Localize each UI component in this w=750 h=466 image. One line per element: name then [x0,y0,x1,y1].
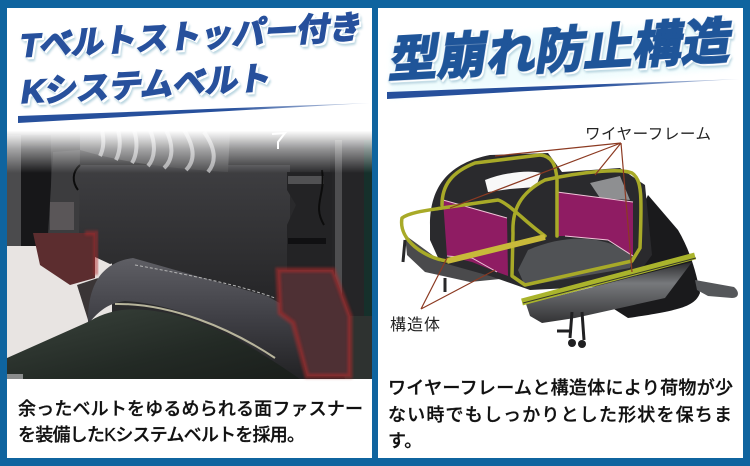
bag right zipper [330,140,372,316]
side tab [695,280,738,298]
left buckle [48,150,80,235]
right buckle [287,172,332,270]
logo icon [272,133,285,149]
left wing underside [405,235,510,282]
title [18,9,365,110]
backdrop [7,245,112,363]
description: す。 [388,431,422,451]
fabric [75,165,290,300]
panel: T-belt stopper K-system belt [7,8,372,458]
title underline [18,103,370,123]
title: 型崩れ防止構造 [386,13,736,88]
title: Kシステムベルト [19,60,274,110]
wave pattern [80,130,230,172]
red leader lines [421,143,632,309]
label: structure: 構造体 [390,316,440,334]
green seat [7,309,300,379]
bag left edge [7,135,21,246]
description: 余ったベルトをゆるめられる面ファスナー [18,399,363,419]
seat leather [88,258,345,379]
label: wire frame: ワイヤーフレーム [585,126,711,143]
lower pouch [526,262,692,323]
left zip pulls [403,240,445,292]
interior [518,239,635,286]
title underline [387,79,740,99]
belt photo [7,125,372,379]
zip pulls [557,312,584,340]
description [18,399,363,445]
panel: shape retention structure [378,8,743,458]
title: Tベルトストッパー付き [18,9,365,64]
main bag [430,153,652,290]
rear black body [600,195,700,318]
magenta structure panels [443,200,508,276]
top of right lobe highlight [590,176,630,200]
handle opening [485,172,541,192]
description [388,377,733,451]
description: を装備したKシステムベルトを採用。 [18,425,305,445]
right belt [278,270,350,376]
bag diagram [402,143,738,348]
description: ない時でもしっかりとした形状を保ちま [388,405,732,425]
right lower dark [345,316,372,379]
yellow wire frames [402,155,641,285]
left belt red glow [33,233,95,285]
description: ワイヤーフレームと構造体により荷物が少 [388,377,733,398]
